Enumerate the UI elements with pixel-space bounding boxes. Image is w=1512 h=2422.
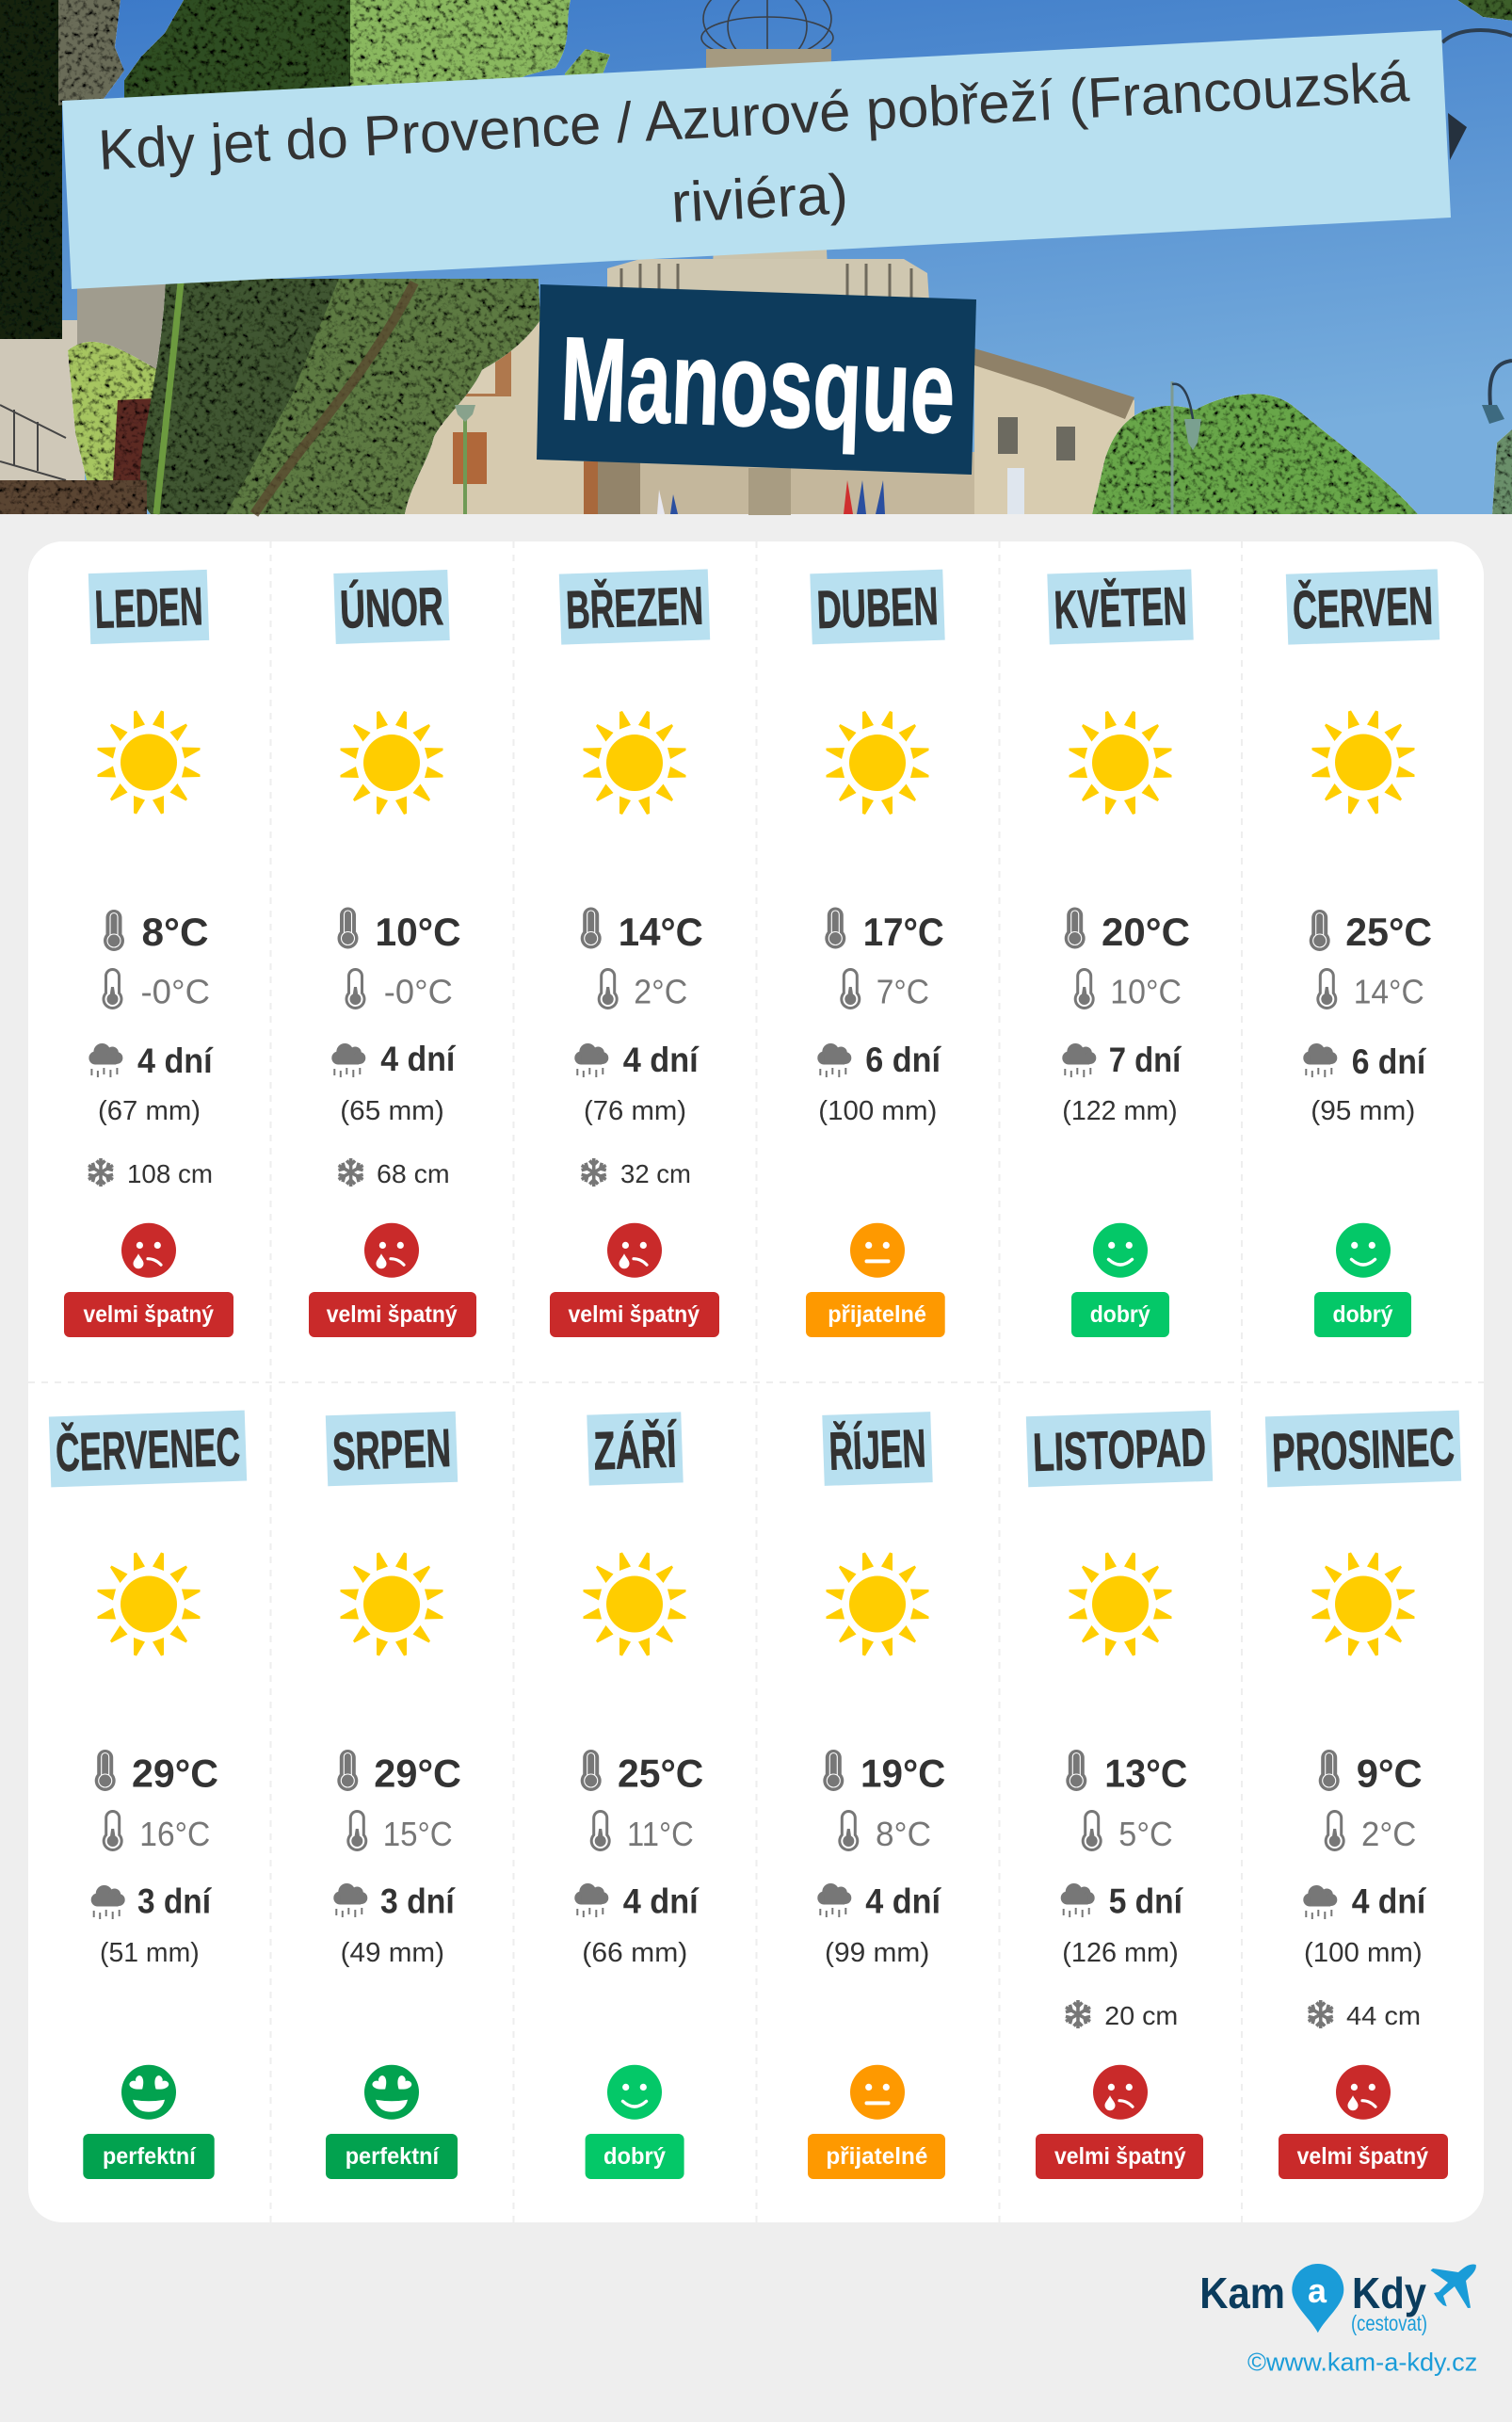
- month label: [49, 1411, 247, 1487]
- icon: rating face: [1336, 1223, 1391, 1278]
- rating badge: velmi špatný: [1054, 2143, 1186, 2170]
- panel: BŘEZEN: [550, 569, 719, 1337]
- rating badge: [326, 2134, 458, 2179]
- precipitation: (122 mm): [1062, 1096, 1178, 1126]
- month label: DUBEN: [816, 576, 940, 640]
- month label: [1286, 569, 1440, 645]
- icon: sun: [1312, 1552, 1414, 1655]
- low temperature: [103, 1810, 210, 1853]
- high temperature: 29°C: [374, 1752, 461, 1795]
- month label: BŘEZEN: [565, 575, 704, 640]
- icon: sun: [341, 711, 442, 815]
- month label: ŘÍJEN: [828, 1417, 927, 1482]
- rain days: 3 dní: [137, 1882, 213, 1921]
- low temperature: [1325, 1810, 1416, 1853]
- title text line 2: riviéra): [669, 162, 849, 234]
- high temperature: [581, 908, 703, 954]
- panel: ČERVEN: [1286, 569, 1440, 1337]
- icon: rating face: [364, 2065, 419, 2120]
- rating badge: [64, 1292, 233, 1337]
- rating badge: přijatelné: [828, 1301, 926, 1328]
- icon: rating face: [121, 2065, 176, 2120]
- high temperature: 20°C: [1102, 910, 1190, 954]
- high temperature: [104, 910, 209, 954]
- precipitation: (100 mm): [1304, 1938, 1423, 1968]
- rating badge: přijatelné: [826, 2143, 927, 2170]
- low temperature: -0°C: [141, 973, 210, 1011]
- snow: 68 cm: [377, 1159, 450, 1188]
- rain days: [1303, 1042, 1427, 1081]
- low temperature: [838, 1810, 931, 1853]
- panel: ZÁŘÍ: [574, 1412, 703, 2179]
- low temperature: 2°C: [1361, 1815, 1416, 1853]
- low temperature: [598, 968, 687, 1011]
- month label: SRPEN: [331, 1418, 452, 1482]
- month label: ZÁŘÍ: [592, 1418, 679, 1481]
- precipitation: (126 mm): [1062, 1938, 1179, 1968]
- icon: sun: [98, 1552, 200, 1655]
- high temperature: [1310, 910, 1432, 954]
- month label: [326, 1412, 458, 1486]
- icon: sun: [827, 1552, 928, 1655]
- snow: [579, 1158, 691, 1188]
- rain days: [1061, 1882, 1184, 1921]
- snow: [1306, 2000, 1421, 2030]
- rating badge: perfektní: [103, 2143, 197, 2170]
- icon: rating face: [607, 1223, 662, 1278]
- low temperature: [345, 968, 453, 1011]
- high temperature: 17°C: [863, 910, 944, 954]
- rain days: [331, 1040, 457, 1078]
- rain days: 7 dní: [1109, 1041, 1182, 1079]
- header photo: Manosque street with tower, trees and blue sky: [0, 0, 1512, 515]
- icon: rating face: [1093, 2065, 1148, 2120]
- rating badge: [1071, 1292, 1169, 1337]
- icon: rating face: [850, 1223, 905, 1278]
- month label: [810, 570, 945, 644]
- low temperature: 14°C: [1354, 973, 1424, 1011]
- high temperature: [1066, 1750, 1187, 1795]
- city name: Manosque: Manosque: [558, 312, 957, 459]
- panel: PROSINEC: [1265, 1411, 1461, 2179]
- low temperature: 5°C: [1118, 1815, 1173, 1853]
- snow: 20 cm: [1104, 2001, 1178, 2030]
- low temperature: [102, 968, 210, 1011]
- rating badge: velmi špatný: [327, 1301, 458, 1328]
- panel: ČERVENEC: [49, 1411, 247, 2179]
- month label: LISTOPAD: [1032, 1417, 1207, 1483]
- low temperature: 16°C: [139, 1815, 210, 1853]
- panel: SRPEN: [326, 1412, 461, 2179]
- low temperature: [840, 968, 929, 1011]
- month label: ČERVEN: [1292, 575, 1434, 640]
- rain days: [1303, 1882, 1427, 1921]
- precipitation: (66 mm): [582, 1938, 687, 1968]
- rain days: 6 dní: [1352, 1042, 1427, 1081]
- icon: sun: [827, 711, 928, 815]
- logo: Kam a Kdy: (cestovat): [1351, 2311, 1427, 2335]
- rain days: 4 dní: [1352, 1882, 1427, 1921]
- snow: 44 cm: [1346, 2001, 1421, 2030]
- rating badge: velmi špatný: [569, 1301, 700, 1328]
- month label: LEDEN: [94, 576, 204, 640]
- rain days: 4 dní: [137, 1041, 214, 1080]
- city name plate: [537, 284, 976, 475]
- rating badge: [1036, 2134, 1203, 2179]
- icon: rating face: [121, 1223, 176, 1278]
- precipitation: (76 mm): [584, 1096, 686, 1126]
- panel: ÚNOR: [309, 570, 476, 1337]
- high temperature: [823, 1750, 945, 1795]
- logo: Kam a Kdy: Kdy: [1352, 2269, 1426, 2317]
- low temperature: -0°C: [384, 973, 453, 1011]
- rain days: [574, 1882, 700, 1921]
- low temperature: [1316, 968, 1424, 1011]
- icon: rating face: [1093, 1223, 1148, 1278]
- high temperature: [1065, 908, 1190, 954]
- rating badge: perfektní: [346, 2143, 440, 2170]
- low temperature: [590, 1810, 694, 1853]
- rain days: 3 dní: [380, 1882, 456, 1921]
- rain days: 6 dní: [865, 1041, 942, 1079]
- icon: rating face: [364, 1223, 419, 1278]
- rain days: 4 dní: [623, 1041, 700, 1079]
- icon: sun: [98, 710, 200, 814]
- rain days: 4 dní: [865, 1882, 942, 1921]
- icon: rating face: [1336, 2065, 1391, 2120]
- high temperature: [337, 908, 461, 954]
- high temperature: 14°C: [619, 910, 703, 954]
- panel: KVĚTEN: [1047, 569, 1194, 1337]
- rating badge: [83, 2134, 215, 2179]
- panel: LEDEN: [64, 570, 233, 1337]
- month label: KVĚTEN: [1053, 575, 1188, 640]
- icon: rating face: [607, 2065, 662, 2120]
- month label: [88, 570, 209, 644]
- high temperature: 8°C: [141, 910, 209, 954]
- precipitation: (49 mm): [341, 1938, 444, 1968]
- snow: [336, 1158, 450, 1188]
- rain days: 4 dní: [623, 1882, 700, 1921]
- month label: [333, 570, 450, 644]
- title text line 1: Kdy jet do Provence / Azurové pobřeží (Francouzská: [97, 50, 1411, 182]
- low temperature: 7°C: [877, 973, 929, 1011]
- month label: [1047, 569, 1194, 645]
- low temperature: 8°C: [876, 1815, 931, 1853]
- rain days: [817, 1041, 942, 1079]
- icon: sun: [1070, 711, 1171, 815]
- rating badge: [1279, 2134, 1448, 2179]
- panel: DUBEN: [806, 570, 945, 1337]
- icon: sun: [584, 1552, 685, 1655]
- low temperature: [346, 1810, 453, 1853]
- icon: sun: [1070, 1552, 1171, 1655]
- month label: ČERVENEC: [55, 1416, 241, 1483]
- high temperature: 13°C: [1104, 1752, 1187, 1795]
- precipitation: (51 mm): [100, 1938, 200, 1968]
- rain days: 5 dní: [1109, 1882, 1184, 1921]
- low temperature: [1082, 1810, 1173, 1853]
- low temperature: 2°C: [634, 973, 687, 1011]
- low temperature: [1074, 968, 1182, 1011]
- high temperature: 9°C: [1357, 1752, 1423, 1795]
- rating badge: [1314, 1292, 1411, 1337]
- rating badge: dobrý: [603, 2143, 666, 2170]
- high temperature: 10°C: [375, 910, 461, 954]
- rain days: 4 dní: [380, 1040, 457, 1078]
- icon: airplane: [1431, 2265, 1476, 2308]
- website credit: ©www.kam-a-kdy.cz: [1247, 2348, 1477, 2376]
- low temperature: 11°C: [627, 1815, 694, 1853]
- high temperature: 19°C: [861, 1752, 945, 1795]
- icon: map pin: [1292, 2264, 1343, 2333]
- rating badge: [586, 2134, 684, 2179]
- snow: 108 cm: [127, 1159, 213, 1188]
- high temperature: 25°C: [1345, 910, 1432, 954]
- high temperature: [581, 1750, 703, 1795]
- month label: [1026, 1411, 1213, 1487]
- high temperature: 29°C: [132, 1752, 218, 1795]
- rain days: [1062, 1041, 1182, 1079]
- snow: [87, 1158, 213, 1188]
- icon: sun: [1312, 710, 1414, 814]
- month label: [559, 569, 710, 645]
- precipitation: (100 mm): [818, 1096, 937, 1126]
- month label: ÚNOR: [339, 576, 444, 640]
- month label: [822, 1412, 933, 1486]
- precipitation: (99 mm): [825, 1938, 929, 1968]
- panel: ŘÍJEN: [808, 1412, 945, 2179]
- icon: sun: [341, 1552, 442, 1655]
- high temperature: 25°C: [618, 1752, 703, 1795]
- precipitation: (95 mm): [1311, 1096, 1415, 1126]
- rain days: [88, 1041, 214, 1080]
- panel: monthly climate table: [28, 541, 1484, 2222]
- high temperature: [1319, 1750, 1423, 1795]
- snow: 32 cm: [620, 1159, 691, 1188]
- rain days: [817, 1882, 942, 1921]
- rating badge: [550, 1292, 719, 1337]
- logo: Kam a Kdy: [1199, 2264, 1476, 2335]
- logo: Kam a Kdy: Kam: [1199, 2269, 1285, 2317]
- rating badge: [808, 2134, 945, 2179]
- rating badge: dobrý: [1090, 1301, 1150, 1328]
- rating badge: [806, 1292, 945, 1337]
- low temperature: 15°C: [383, 1815, 453, 1853]
- month label: [587, 1412, 684, 1486]
- low temperature: 10°C: [1110, 973, 1182, 1011]
- high temperature: [337, 1750, 461, 1795]
- rating badge: velmi špatný: [1297, 2143, 1428, 2170]
- title band: [62, 30, 1451, 289]
- icon: sun: [584, 711, 685, 815]
- rain days: [574, 1041, 700, 1079]
- icon: rating face: [850, 2065, 905, 2120]
- icon: map pin: a: [1308, 2271, 1327, 2310]
- rating badge: [309, 1292, 476, 1337]
- precipitation: (65 mm): [340, 1096, 444, 1126]
- rating badge: velmi špatný: [83, 1301, 214, 1328]
- precipitation: (67 mm): [98, 1096, 201, 1126]
- rain days: [333, 1882, 456, 1921]
- snow: [1064, 2000, 1178, 2030]
- high temperature: [825, 908, 944, 954]
- high temperature: [95, 1750, 218, 1795]
- panel: LISTOPAD: [1026, 1411, 1213, 2179]
- rating badge: dobrý: [1333, 1301, 1393, 1328]
- rain days: [91, 1882, 213, 1921]
